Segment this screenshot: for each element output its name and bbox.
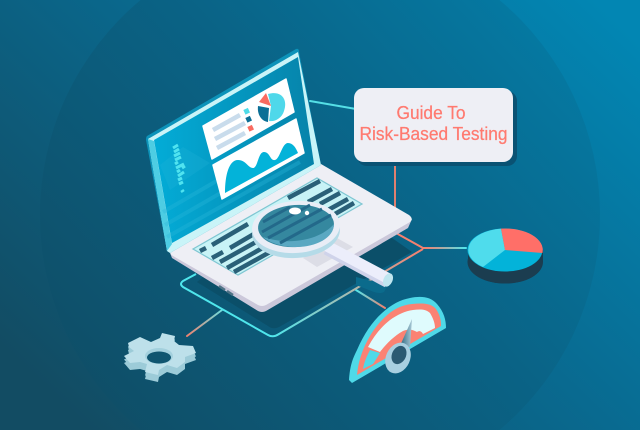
pie chart [468, 228, 543, 284]
gauge dial face [368, 309, 435, 352]
laptop base [170, 164, 412, 312]
laptop lid [146, 49, 321, 253]
gauge icon [349, 297, 446, 383]
handle shadow [356, 277, 388, 293]
line: platform to gear [187, 310, 222, 336]
gauge cyan segment [363, 350, 380, 369]
handle [327, 246, 395, 288]
magnifying glass [250, 198, 395, 293]
platform under laptop [181, 200, 423, 336]
lens [257, 202, 335, 250]
gauge hub [380, 338, 416, 378]
line: platform to gauge [356, 290, 385, 308]
laptop [146, 49, 412, 312]
title text: Guide To [396, 103, 465, 123]
panel: area chart [213, 119, 304, 199]
touchpad [303, 238, 353, 267]
connector lines [187, 101, 466, 336]
panel: list and pie [203, 79, 294, 159]
gauge body [349, 297, 446, 383]
code marks [173, 145, 185, 192]
title callout [354, 88, 517, 166]
gear icon [124, 333, 196, 382]
line: title to laptop [394, 160, 396, 212]
gauge needle [399, 319, 412, 348]
keyboard [193, 178, 362, 275]
ports [219, 286, 233, 295]
title text: Risk-Based Testing [360, 124, 508, 144]
screen [154, 57, 314, 243]
lens rim [250, 203, 342, 261]
line: laptop to pie chart [396, 233, 466, 248]
line: laptop to title [310, 101, 356, 109]
gauge salmon band [357, 304, 441, 375]
